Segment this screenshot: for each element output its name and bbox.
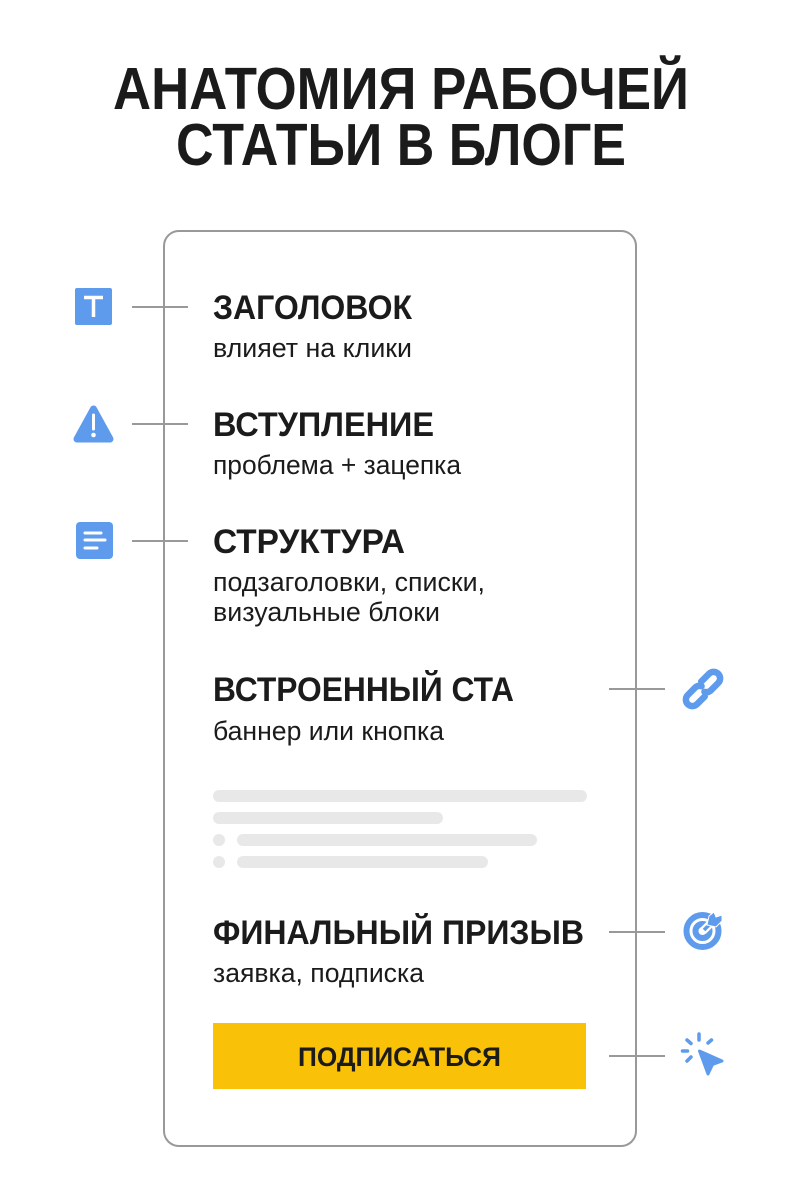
section: structure: СТРУКТУРА — [213, 523, 405, 561]
connector: title — [132, 306, 188, 308]
section: inline CTA — [213, 670, 514, 746]
section: structure: визуальные блоки — [213, 597, 440, 627]
connector: structure — [132, 540, 188, 542]
icon: document lines — [76, 522, 113, 559]
title: СТАТЬИ В БЛОГЕ — [176, 112, 626, 178]
button: subscribe — [213, 1023, 586, 1089]
section: structure — [213, 523, 485, 627]
section: intro — [213, 406, 462, 480]
placeholder text lines — [213, 790, 587, 868]
section: inline CTA: баннер или кнопка — [213, 716, 445, 746]
section: intro: ВСТУПЛЕНИЕ — [213, 406, 434, 444]
section: final call: ФИНАЛЬНЫЙ ПРИЗЫВ — [213, 913, 584, 952]
icon: chain link — [683, 669, 723, 709]
connector: final call — [609, 931, 665, 933]
section: inline CTA: ВСТРОЕННЫЙ СТА — [213, 670, 514, 709]
connector: inline CTA — [609, 688, 665, 690]
connector: intro — [132, 423, 188, 425]
section: final call — [213, 913, 584, 988]
section: headline — [213, 289, 412, 363]
button: subscribe: ПОДПИСАТЬСЯ — [298, 1042, 501, 1072]
title: АНАТОМИЯ РАБОЧЕЙ — [113, 55, 689, 122]
connector: button — [609, 1055, 665, 1057]
panel: article card — [164, 231, 636, 1146]
icon: warning triangle — [77, 409, 110, 439]
title — [113, 55, 689, 178]
icon: text T — [75, 288, 112, 325]
section: final call: заявка, подписка — [213, 958, 425, 988]
icon: cursor click — [682, 1034, 722, 1074]
icon: target with arrow — [686, 912, 722, 947]
section: structure: подзаголовки, списки, — [213, 567, 485, 597]
section: headline: ЗАГОЛОВОК — [213, 289, 412, 327]
section: headline: влияет на клики — [213, 333, 412, 363]
section: intro: проблема + зацепка — [213, 450, 462, 480]
